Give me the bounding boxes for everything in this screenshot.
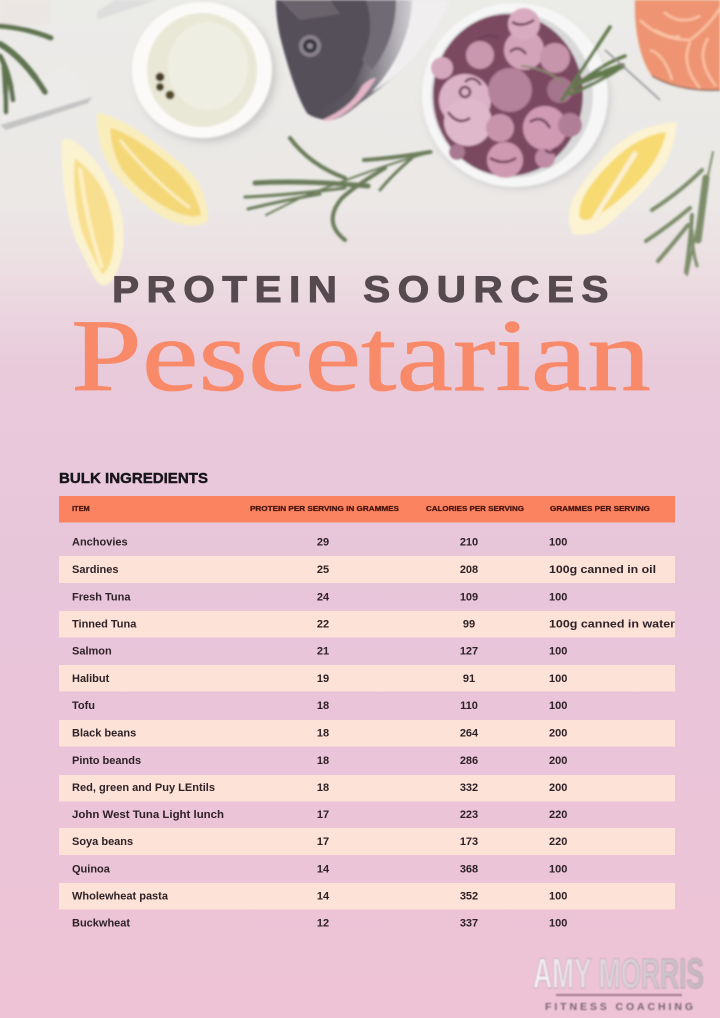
table header row: PROTEIN PER SERVING IN GRAMMES (250, 504, 399, 513)
row: Halibut: 100 (549, 673, 567, 685)
row: Sardines: 25 (317, 564, 329, 576)
row: John West Tuna Light lunch (72, 809, 567, 821)
row: Tofu (72, 700, 567, 712)
icon: rosemary top left (0, 26, 51, 112)
row: Halibut: 19 (317, 673, 329, 685)
row: Fresh Tuna (72, 592, 567, 604)
row: Wholewheat pasta: 352 (460, 890, 478, 902)
row: Fresh Tuna: 100 (549, 592, 567, 604)
row: Salmon (72, 646, 567, 658)
row: Sardines: Sardines (72, 564, 118, 576)
icon: whole fish head (276, 0, 450, 121)
icon: salmon steak (635, 0, 720, 90)
row: Black beans (72, 728, 567, 740)
row: Buckwheat: 337 (460, 918, 478, 930)
row: Black beans: 18 (317, 728, 329, 740)
table: bulk ingredients (59, 496, 676, 930)
row: John West Tuna Light lunch: 17 (317, 809, 329, 821)
table header row (59, 496, 675, 522)
row: Tinned Tuna: 22 (317, 618, 329, 630)
row: Salmon: 100 (549, 646, 567, 658)
icon: wooden board top left (0, 0, 157, 130)
row: Salmon: 127 (460, 646, 478, 658)
row: Quinoa: 100 (549, 864, 567, 876)
row: Salmon: 21 (317, 646, 329, 658)
row: Soya beans: 173 (460, 836, 478, 848)
table row stripes (59, 556, 675, 910)
row: Fresh Tuna: Fresh Tuna (72, 592, 131, 604)
row: Anchovies: Anchovies (72, 536, 128, 548)
heading: Bulk Ingredients: BULK INGREDIENTS (59, 470, 208, 487)
icon: rosemary on bowl (522, 27, 625, 100)
photo: seafood flat lay (0, 0, 720, 285)
title: Pescetarian: Pescetarian (71, 299, 651, 413)
row: Tinned Tuna (72, 618, 676, 630)
row: Wholewheat pasta: 14 (317, 890, 330, 902)
row: Pinto beands: 18 (317, 755, 329, 767)
row: Quinoa (72, 864, 567, 876)
row: Buckwheat: 12 (317, 918, 329, 930)
row: Black beans: 200 (549, 728, 567, 740)
row: Red, green and Puy LEntils (72, 782, 567, 794)
row: Wholewheat pasta (72, 890, 567, 902)
row: Tofu: 18 (317, 700, 329, 712)
row: Anchovies: 29 (317, 536, 329, 548)
icon: net string (605, 50, 660, 100)
row: Pinto beands: Pinto beands (72, 755, 141, 767)
row: Red, green and Puy LEntils: 332 (460, 782, 478, 794)
row: Wholewheat pasta: Wholewheat pasta (72, 890, 169, 902)
row: Sardines (72, 564, 656, 576)
icon: bowl of baby octopus (422, 3, 609, 188)
icon: lemon wedge left (62, 139, 124, 285)
row: Tofu: 100 (549, 700, 567, 712)
table header row: CALORIES PER SERVING (426, 504, 524, 513)
table header row: ITEM (72, 504, 90, 513)
icon: bowl of oil (132, 2, 276, 142)
row: Pinto beands: 286 (460, 755, 478, 767)
row: Red, green and Puy LEntils: 200 (549, 782, 567, 794)
row: Anchovies: 100 (549, 536, 567, 548)
row: John West Tuna Light lunch: John West Tuna Light lunch (72, 809, 224, 821)
row: Soya beans (72, 836, 567, 848)
row: John West Tuna Light lunch: 220 (549, 809, 567, 821)
row: Sardines: 208 (460, 564, 478, 576)
row: Tinned Tuna: 99 (463, 618, 475, 630)
row: Black beans: Black beans (72, 728, 136, 740)
row: Quinoa: Quinoa (72, 864, 111, 876)
row: Anchovies (72, 536, 567, 548)
row: Anchovies: 210 (460, 536, 478, 548)
row: Red, green and Puy LEntils: 18 (317, 782, 329, 794)
logo: Amy Morris Fitness Coaching: FITNESS COACHING (545, 1001, 693, 1013)
row: Buckwheat: 100 (549, 918, 567, 930)
icon: lemon wedge centre (97, 113, 208, 225)
row: Fresh Tuna: 109 (460, 592, 478, 604)
row: Sardines: 100g canned in oil (549, 564, 656, 576)
row: Red, green and Puy LEntils: Red, green and Puy LEntils (72, 782, 215, 794)
row: Buckwheat (72, 918, 567, 930)
icon: lemon wedge right (569, 122, 677, 235)
row: Halibut: Halibut (72, 673, 110, 685)
row: Wholewheat pasta: 100 (549, 890, 567, 902)
row: Black beans: 264 (460, 728, 479, 740)
row: John West Tuna Light lunch: 223 (460, 809, 478, 821)
title: Protein Sources: PROTEIN SOURCES (112, 270, 616, 311)
row: Fresh Tuna: 24 (317, 592, 330, 604)
icon: rosemary right (646, 152, 713, 275)
icon: rosemary centre (245, 138, 432, 240)
row: Salmon: Salmon (72, 646, 112, 658)
row: Soya beans: 17 (317, 836, 329, 848)
row: Quinoa: 368 (460, 864, 478, 876)
row: Soya beans: 220 (549, 836, 567, 848)
row: Quinoa: 14 (317, 864, 330, 876)
row: Tofu: Tofu (72, 700, 95, 712)
row: Pinto beands (72, 755, 567, 767)
row: Halibut (72, 673, 567, 685)
row: Pinto beands: 200 (549, 755, 567, 767)
row: Soya beans: Soya beans (72, 836, 133, 848)
row: Halibut: 91 (463, 673, 475, 685)
row: Buckwheat: Buckwheat (72, 918, 130, 930)
row: Tinned Tuna: Tinned Tuna (72, 618, 137, 630)
table header row: GRAMMES PER SERVING (550, 504, 650, 513)
row: Tofu: 110 (460, 700, 478, 712)
row: Tinned Tuna: 100g canned in water (549, 618, 676, 630)
